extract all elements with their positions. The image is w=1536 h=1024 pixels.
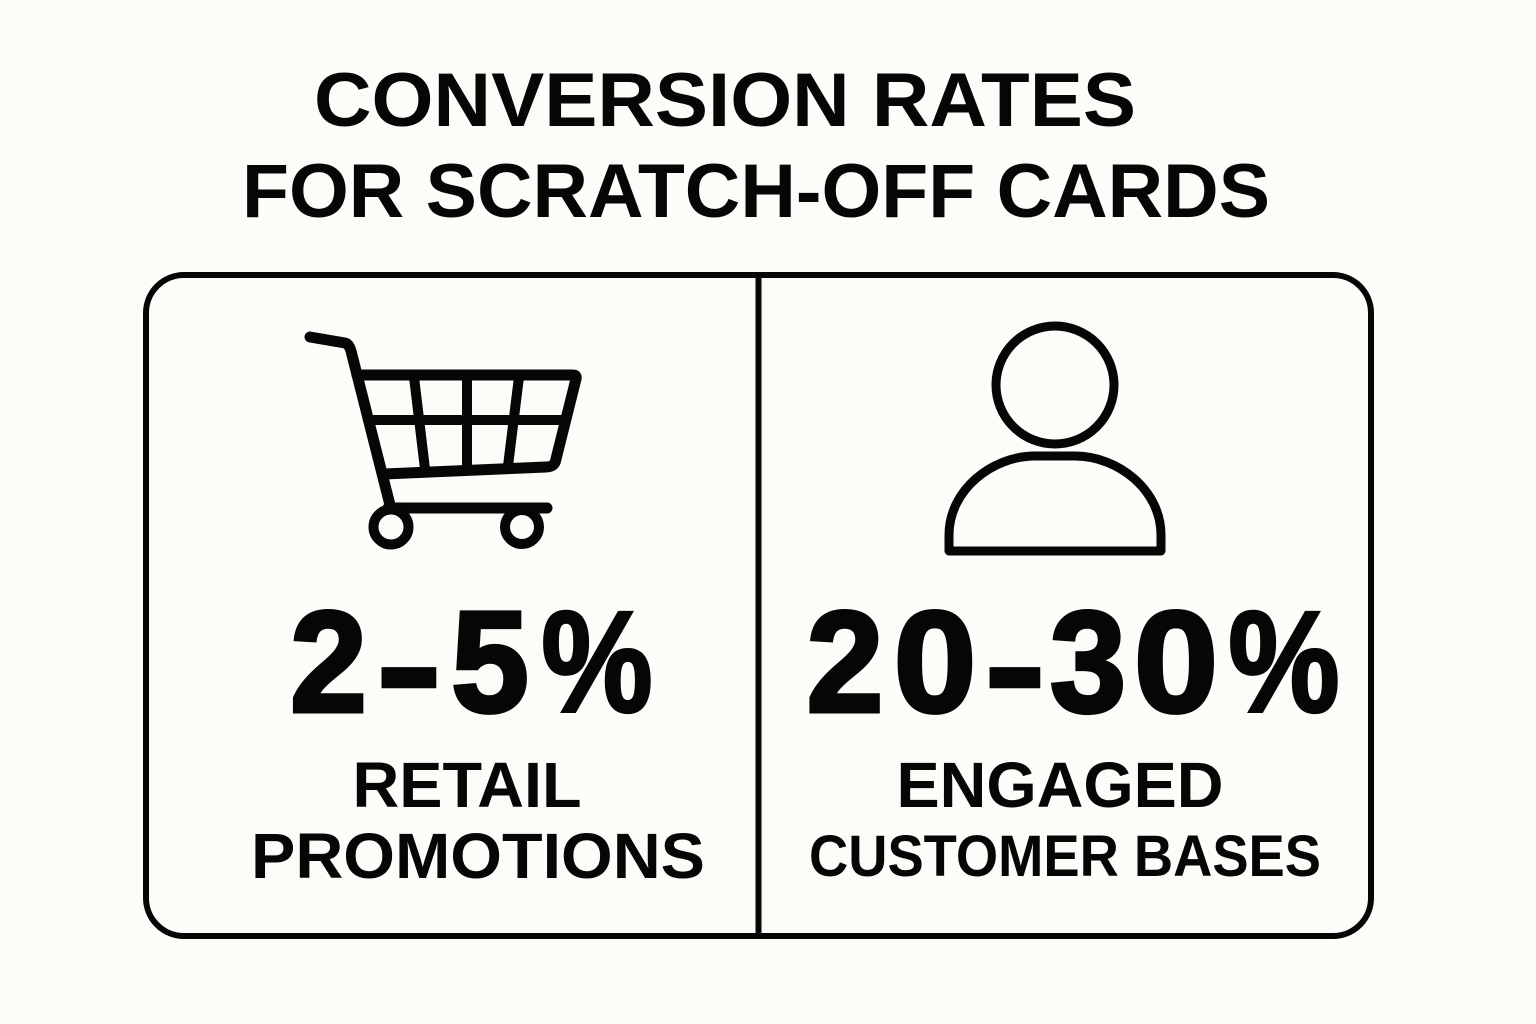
icon: shopping cart [310, 337, 576, 544]
big stat: 2-5%: 5 [451, 583, 529, 743]
label: retail promotions [251, 749, 705, 892]
label: engaged customer bases: ENGAGED [896, 749, 1224, 821]
title: CONVERSION RATES [314, 58, 1136, 143]
panel: comparison card [146, 275, 1371, 936]
label: engaged customer bases [809, 749, 1321, 889]
label: retail promotions: PROMOTIONS [251, 820, 705, 892]
title [242, 58, 1270, 234]
big stat: 20-30%: 3 [1050, 581, 1126, 742]
label: retail promotions: RETAIL [352, 749, 582, 821]
label: engaged customer bases: CUSTOMER BASES [809, 824, 1321, 889]
panel: engaged customer bases [807, 326, 1340, 889]
icon: person [949, 326, 1161, 551]
big stat: 2-5%: % [541, 581, 653, 742]
title: FOR SCRATCH-OFF CARDS [242, 149, 1270, 234]
big stat: 20-30%: - [985, 584, 1045, 746]
big stat: 2-5% [290, 581, 653, 746]
panel: retail promotions [251, 337, 705, 892]
big stat: 20-30%: 2 [807, 581, 883, 742]
big stat: 20-30%: % [1228, 581, 1340, 742]
big stat: 2-5%: 2 [290, 581, 367, 742]
big stat: 20-30%: 0 [1134, 582, 1218, 743]
big stat: 20-30% [807, 581, 1340, 746]
big stat: 20-30%: 0 [894, 581, 976, 742]
big stat: 2-5%: - [377, 585, 441, 746]
